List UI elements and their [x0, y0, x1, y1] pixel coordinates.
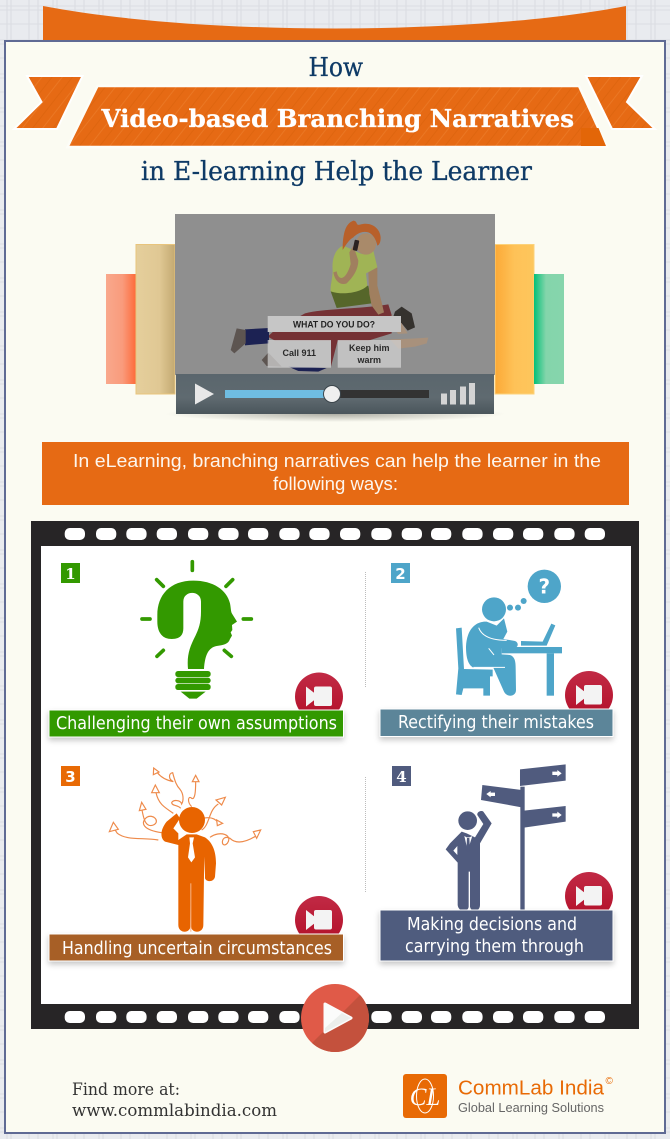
ribbon main [68, 86, 607, 147]
choice box: Keep him warm [338, 340, 401, 368]
icon: person at laptop thinking: ? [539, 575, 550, 599]
icon: man at signpost [446, 764, 566, 911]
volume bars [441, 383, 475, 404]
question box: WHAT DO YOU DO? [293, 319, 375, 329]
logo: CommLab India [403, 1074, 614, 1118]
badge 1 [61, 563, 80, 583]
side bar red [106, 274, 136, 384]
ribbon left tail [14, 76, 82, 129]
badge 3 [61, 766, 80, 786]
intro text: following ways: [273, 473, 398, 494]
icon: person at laptop thinking [456, 570, 562, 696]
video camera badge 3 [295, 896, 343, 944]
icon: question mark head bulb [142, 562, 251, 699]
title block [14, 53, 655, 187]
video camera badge 4 [565, 872, 613, 920]
intro text: In eLearning, branching narratives can help the learner in the [73, 450, 601, 471]
progress fill [225, 390, 332, 398]
progress knob [324, 386, 340, 402]
label 2 [380, 709, 613, 736]
title line: in E-learning Help the Learner: in E-learning Help the Learner [141, 157, 533, 187]
icon: confused man with arrows [109, 768, 261, 932]
film strip panel [31, 521, 639, 1029]
item 1 [49, 562, 344, 737]
badge 4: 4 [396, 768, 407, 786]
label 4: carrying them through [405, 936, 584, 957]
label 3: Handling uncertain circumstances [62, 938, 332, 959]
find more text [72, 1080, 277, 1121]
video scene: first aid [231, 221, 428, 372]
side bar green [534, 274, 564, 384]
footer [72, 1074, 614, 1121]
video camera badge 2 [565, 671, 613, 719]
choice box: Call 911 [268, 340, 331, 368]
film frame [31, 521, 639, 1029]
logo wordmark: CommLab India [458, 1076, 605, 1099]
logo mark: CL [410, 1084, 440, 1111]
intro banner [42, 442, 629, 505]
logo mark [403, 1074, 447, 1118]
player shadow [165, 406, 505, 422]
play triangle [195, 384, 214, 404]
woman on the phone [331, 221, 384, 315]
label 4: Making decisions and [407, 914, 577, 935]
label 3 [49, 934, 344, 961]
find more text: Find more at: [72, 1080, 180, 1100]
find more text: www.commlabindia.com [72, 1101, 277, 1121]
item 4 [380, 764, 613, 961]
question box [268, 316, 401, 332]
badge 4 [392, 766, 411, 786]
title line: Video-based Branching Narratives: Video-based Branching Narratives [100, 104, 574, 133]
sprocket holes top [65, 528, 605, 540]
sprocket holes bottom [65, 1011, 605, 1023]
registered mark: © [606, 1076, 614, 1087]
badge 1: 1 [65, 565, 76, 583]
label 4 [380, 910, 613, 961]
choice box: Keep him warm: Keep him [349, 343, 390, 353]
item 2 [380, 563, 613, 736]
item 3 [49, 766, 344, 961]
video frame [175, 214, 495, 375]
label 2: Rectifying their mistakes [398, 712, 594, 733]
video player illustration [106, 214, 564, 422]
title line: How: How [308, 53, 363, 83]
top orange tab [43, 6, 626, 45]
progress track [225, 390, 429, 398]
big play button [301, 984, 369, 1052]
ribbon right tail [586, 76, 655, 129]
man on the floor [231, 304, 428, 372]
label 1: Challenging their own assumptions [56, 713, 337, 734]
side bar orange [495, 244, 534, 394]
side bar tan [136, 244, 175, 394]
badge 3: 3 [65, 768, 76, 786]
choice box: Keep him warm: warm [357, 355, 381, 365]
badge 2: 2 [395, 565, 406, 583]
logo tagline: Global Learning Solutions [458, 1101, 604, 1115]
control bar [176, 374, 494, 414]
choice box: Call 911: Call 911 [283, 348, 316, 358]
video camera badge 1 [295, 672, 343, 720]
badge 2 [391, 563, 410, 583]
